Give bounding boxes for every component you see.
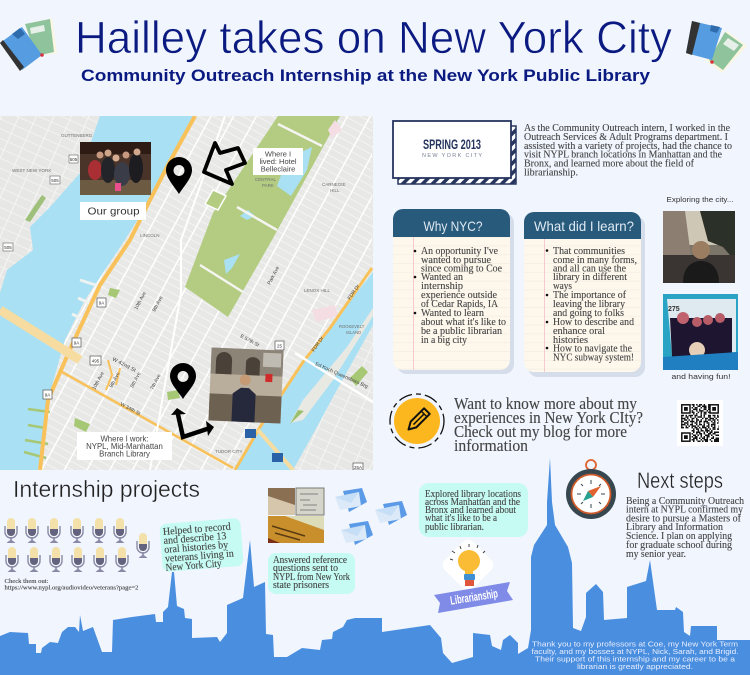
map labels: LENOX HILL [304,288,331,293]
card: What did I learn: come in many forms, [553,255,637,266]
card: Why NYC [393,209,514,374]
intro text: assisted with a variety of projects, had the chance to [524,141,732,152]
map labels: E 57th St [239,333,261,349]
photo: our group [80,142,151,195]
blog call to action: Check out my blog for more [454,422,627,441]
map labels: HILL [330,188,340,193]
icon: envelope 2 [341,521,373,545]
card: What did I learn: enhance oral [553,326,605,337]
map labels: 9th Ave [151,295,165,313]
link: veterans oral histories: https://www.nypl.org/audiovideo/veterans?page=2 [4,584,138,592]
next steps text [626,496,745,560]
next steps text: Library and Information [626,522,724,533]
icon: map pin, library [170,363,196,399]
highway shields: 9A [74,340,79,346]
map labels: 7th Ave [149,373,163,391]
map labels: CARNEGIE [322,182,346,187]
icon: books right [686,21,747,73]
map labels: TUDOR CITY [215,449,242,454]
arrow: to library [171,408,214,437]
card: What did I learn: ways [553,281,572,292]
banner: Librarianship: Librarianship [449,586,499,608]
highway shields: 9A [99,300,104,306]
skyline [0,458,750,675]
card: What did I learn: leaving the library [553,299,626,310]
label: where I lived [253,148,303,175]
card: Why NYC: in a big city [421,335,468,346]
next steps text: desire to pursue a Masters of [626,514,741,524]
label: where I work: NYPL, Mid-Manhattan [86,442,163,451]
thank you text: Their support of this internship and my career to be a [535,654,736,664]
heading: internship projects: Internship projects [13,476,200,502]
intro text: As the Community Outreach intern, I worked in the [524,123,730,134]
QR code [677,400,723,446]
title: Hailley takes on New York City [75,12,672,63]
photo: having fun [663,294,738,370]
thank you text [532,640,738,671]
card: What did I learn: The importance of [553,290,626,301]
highway shields: 495 [92,358,100,364]
callout: oral histories: Helped to record [162,522,232,538]
icons: microphones [5,518,149,572]
card: Why NYC: experience outside [421,290,497,301]
next steps text: intern at NYPL confirmed my [626,504,744,516]
card: Why NYC: Why NYC? [424,218,483,234]
card: Why NYC: Wanted an [421,272,464,283]
icon: books left [0,18,57,71]
label: where I work [77,432,172,460]
blog call to action [454,394,643,455]
callout: reference questions: state prisoners [273,580,329,591]
label: our group [80,202,146,220]
badge: Spring 2013: SPRING 2013 [423,136,481,152]
highway shields: 505 [51,178,59,183]
callout: explored library locations: public librarian. [425,522,484,533]
next steps text: Science. I plan on applying [626,531,733,542]
heading: next steps: Next steps [637,468,723,493]
photo: exploring the city [663,211,735,283]
map labels: Park Ave [266,265,281,286]
blog call to action: Want to know more about my [454,394,638,413]
map labels: FDR Dr [311,336,326,353]
blog call to action: information [454,436,528,455]
photo collage: reference questions [268,488,324,543]
label: where I lived: Where I [265,150,291,158]
card: Why NYC: internship [421,281,463,292]
callout: explored library locations: Bronx and learned about [425,505,516,516]
card: Why NYC: of Cedar Rapids, IA [421,299,498,310]
icon: lightbulb [440,537,496,593]
label: where I lived: Belleclaire [261,164,295,174]
map labels: LINCOLN [140,233,160,238]
map of Manhattan [0,116,373,470]
map labels: 10th Ave [133,291,148,311]
card: What did I learn: What did I learn? [534,218,634,234]
caption: exploring: Exploring the city... [666,195,734,204]
next steps text: Being a Community Outreach [626,496,745,507]
callout: explored library locations: across Manhattan and the [425,497,521,508]
map labels: GUTTENBERG [61,133,93,138]
map labels: W 42nd St [111,356,137,374]
callout: explored library locations: what it's like to be a [425,513,498,524]
callout: oral histories: oral histories by [164,540,229,556]
highway shields [3,155,363,470]
highway shields: 505 [70,157,78,162]
label: where I lived: lived: Hotel [259,157,297,166]
map labels: W 34th St [119,401,142,417]
photo: having fun: 275 [668,306,680,313]
map labels: 9th Ave [108,371,122,389]
map labels: FDR Dr [347,284,362,301]
icon: envelope 3 [375,501,407,525]
icon: pencil badge [390,394,444,448]
badge: Spring 2013 [393,121,516,184]
intro text: Outreach Services & Adult Programs department. I [524,132,728,143]
intro text: librarianship. [524,168,578,178]
map labels [12,133,369,454]
card: Why NYC: about what it's like to [421,317,506,328]
map labels: ISLAND [346,330,361,335]
highways [40,116,195,470]
highway shields: 9A [45,392,50,398]
subtitle: Community Outreach Internship at the New York Public Library [81,66,651,85]
callout: reference questions: questions sent to [273,563,338,574]
callout: explored library locations [419,483,528,537]
card: Why NYC: be a public librarian [421,326,503,337]
card: What did I learn: How to describe and [553,317,635,328]
thank you text: librarian is greatly appreciated. [577,662,693,671]
map labels: CENTRAL [255,177,277,182]
card: What did I learn [524,212,645,377]
thank you text: faculty, and my bosses at NYPL, Nick, Sarah, and Brigid. [532,647,738,656]
blog call to action: experiences in New York CIty? [454,408,643,427]
map labels: WEST NEW YORK [12,168,52,173]
card: What did I learn: and going to folks [553,308,624,319]
icon: map pin, hotel [166,157,192,194]
icon: envelope 1 [335,488,367,512]
Manhattan street grid [42,116,372,470]
callout: explored library locations: Explored library locations [425,489,521,500]
card: What did I learn: and all can use the [553,264,626,274]
highway shields: 505 [4,245,12,250]
label: our group: Our group [88,206,140,218]
map labels: ROOSEVELT [339,324,365,329]
callout: reference questions: NYPL from New York [273,572,350,583]
thank you text: Thank you to my professors at Coe, my New York Term [532,640,738,648]
intro text: Bronx, and learned more about the field of [524,158,694,170]
card: What did I learn: NYC subway system! [553,352,634,364]
icon: compass [566,460,616,519]
card: Why NYC: wanted to pursue [421,255,491,266]
photo: library [208,347,284,424]
intro text [524,123,732,178]
card: Why NYC: since coming to Coe [421,264,502,274]
card: What did I learn: library in different [553,272,627,283]
card: What did I learn: How to navigate the [553,344,632,354]
Hudson river [0,116,195,470]
Central Park [185,116,340,317]
label: where I work: Where I work: [100,434,149,444]
label: where I work: Branch Library [99,450,150,458]
map labels: PARK [262,183,274,188]
arrow: to hotel [204,143,245,184]
map labels: Ed Koch Queensboro Brg [314,361,369,390]
Roosevelt island [290,308,373,423]
next steps text: for graduate school during [626,540,733,551]
callout: oral histories [159,518,244,574]
parks [205,190,226,210]
highway shields: 25 [277,344,282,348]
callout: oral histories: and describe 13 [163,531,227,547]
callout: oral histories: New York City [165,558,223,574]
intro text: visit NYPL branch locations in Manhattan and the [524,150,722,160]
map labels: 8th Ave [129,371,143,389]
callout: reference questions [268,553,355,594]
link: veterans oral histories [4,578,138,592]
card: What did I learn: histories [553,335,588,346]
card: Why NYC: Wanted to learn [421,308,485,319]
badge: Spring 2013: NEW YORK CITY [422,153,482,159]
callout: oral histories: veterans living in [165,548,235,565]
caption: having fun: and having fun! [672,372,730,381]
card: Why NYC: An opportunity I've [421,246,498,257]
highway shields: 25A [354,465,362,470]
map labels: 10th Ave [91,371,106,391]
banner: Librarianship [434,582,513,613]
card: What did I learn: That communities [553,246,625,257]
East river [235,272,373,470]
callout: reference questions: Answered reference [273,555,348,566]
next steps text: my senior year. [626,549,686,560]
link: veterans oral histories: Check them out: [4,578,49,585]
